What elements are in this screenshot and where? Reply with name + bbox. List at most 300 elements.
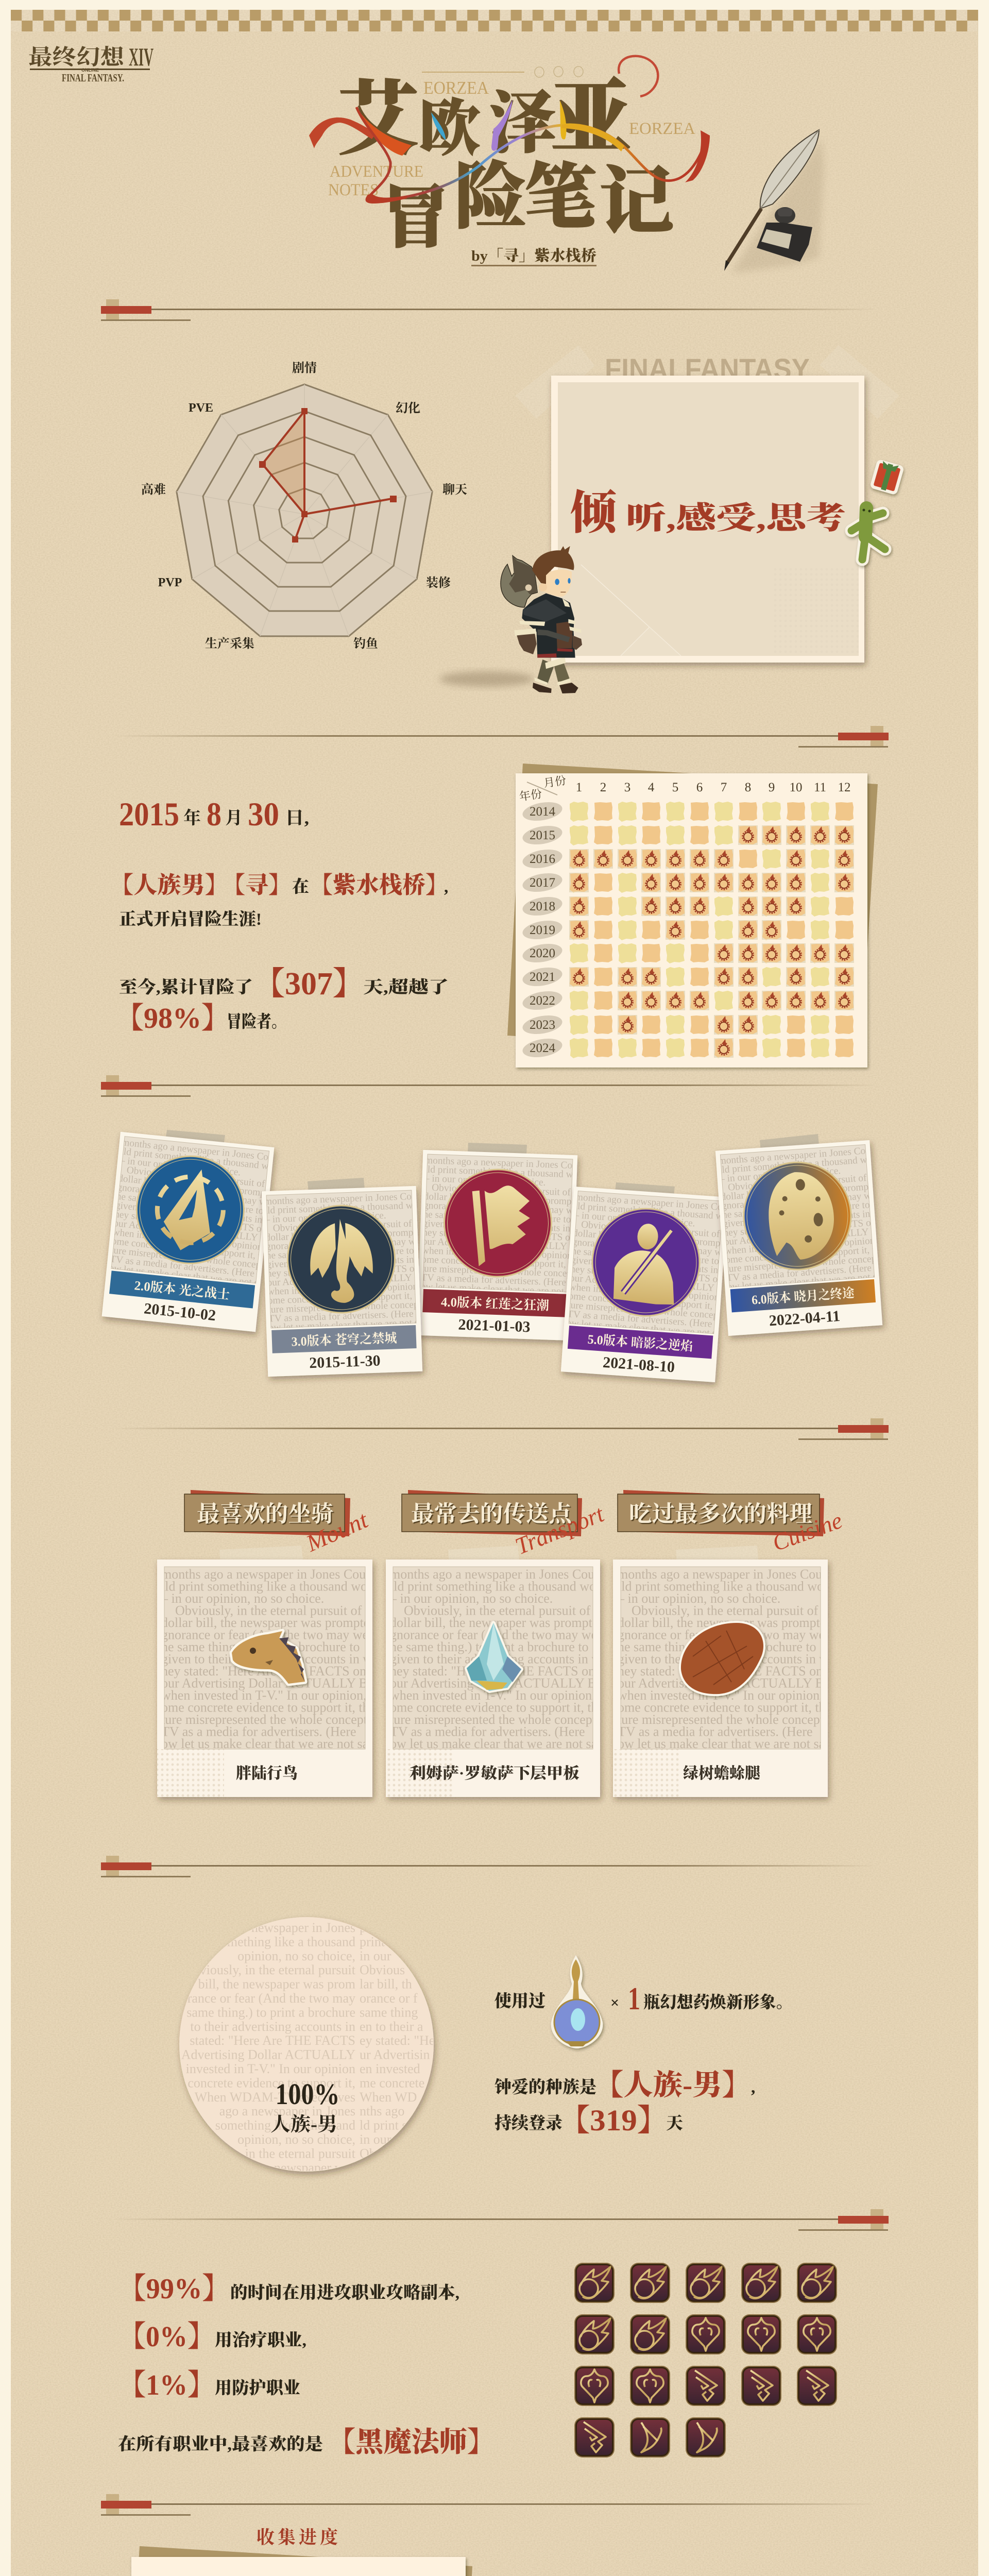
panel: motto note card: FINALFANTASY <box>605 352 810 385</box>
card: 5.0 expansion: ow let us make clear that we are not sa <box>566 1318 721 1340</box>
card: 5.0 expansion: – in our opinion, no so choice. <box>573 1210 695 1229</box>
card: 2.0 expansion: ome concrete evidence to support it, the <box>111 1236 271 1263</box>
calendar header: 10 <box>789 781 803 794</box>
medal <box>589 1205 703 1319</box>
chart: race share circle: en invested <box>360 2061 420 2076</box>
chart: race share circle: lar bill, th <box>360 1977 412 1992</box>
card: mount: he same thing.) to print a brochure to <box>161 1639 360 1654</box>
card: 6.0 expansion: dollar bill, the newspaper was prompted <box>721 1181 881 1202</box>
text block: adventure start: , <box>444 878 448 896</box>
card: 6.0 expansion <box>715 1139 904 1336</box>
card: 3.0 expansion: ow let us make clear that we are not sa <box>268 1317 423 1333</box>
divider 7 <box>101 2494 878 2516</box>
text block: adventure start: 【紫水栈桥】 <box>310 872 449 898</box>
card: mount: gnorance or fear (And the two may well <box>161 1627 376 1642</box>
card: mount: dollar bill, the newspaper was prompted <box>161 1615 376 1630</box>
chart: race share circle: in our <box>360 1948 391 1963</box>
card: 5.0 expansion: dollar bill, the newspaper was prompted <box>572 1228 733 1250</box>
card: 5.0 expansion: 5.0版本 暗影之逆焰 <box>587 1332 693 1354</box>
card: 6.0 expansion: – in our opinion, no so choice. <box>719 1165 841 1184</box>
card: 2.0 expansion: given to their advertising accounts in wh <box>115 1200 278 1227</box>
icon: gift sticker <box>872 460 903 494</box>
card: teleport: hey stated: "Here Are THE FACTS on w <box>390 1664 608 1679</box>
card: 4.0 expansion: when invested in T-V." In our opinion, w <box>422 1245 585 1262</box>
calendar header: 年份 <box>519 787 543 803</box>
radar chart: PVP <box>158 576 182 589</box>
icon: cactuar sticker <box>851 508 885 560</box>
card: 2.0 expansion: gnorance or fear (And the two may well <box>116 1182 277 1209</box>
card: 2.0 expansion: our Advertising Dollar ACTUALLY BUYS <box>113 1218 287 1246</box>
chart: race share circle: something like a thousand <box>215 1934 355 1949</box>
heading: favourite mount: 最喜欢的坐骑 <box>197 1501 334 1527</box>
card: 4.0 expansion: months ago a newspaper in Jones County <box>425 1155 590 1172</box>
card: 3.0 expansion: hey stated: "Here Are THE FACTS on w <box>267 1263 429 1279</box>
card: cuisine: dollar bill, the newspaper was prompted <box>618 1615 832 1630</box>
card: 5.0 expansion: Obviously, in the eternal pursuit of <box>581 1219 721 1240</box>
text block: fantasia usage: 钟爱的种族是 <box>494 2078 596 2097</box>
panel: login calendar <box>507 764 878 1067</box>
calendar year pills <box>521 799 564 1060</box>
card: teleport: 利姆萨·罗敏萨下层甲板 <box>410 1765 579 1782</box>
tapes for favourite cards <box>219 1546 758 1564</box>
card: 5.0 expansion: months ago a newspaper in Jones County <box>575 1192 741 1214</box>
chart: race share circle: ago a newspaper in Jones <box>219 2104 355 2119</box>
card: cuisine: our Advertising Dollar ACTUALLY BUYS <box>618 1675 851 1691</box>
chart: race share circle: nths ago <box>360 2104 404 2119</box>
card: teleport: he same thing.) to print a brochure to <box>390 1639 589 1654</box>
card: cuisine: ome concrete evidence to support it, the <box>618 1700 831 1715</box>
icon: chocobo head sticker <box>232 1631 305 1684</box>
radar data polygon <box>262 411 393 539</box>
card: teleport: – in our opinion, no so choice. <box>389 1591 553 1606</box>
logo: Final Fantasy XIV: 最终幻想 <box>28 45 126 70</box>
text block: adventure start: 正式开启冒险生涯! <box>119 909 262 929</box>
title: 艾欧泽亚冒险笔记: ADVENTURE <box>330 162 423 180</box>
chart: race share circle: When WD <box>360 2090 417 2105</box>
chart: race share circle: bill, the newspaper was prom <box>198 1977 355 1992</box>
card: 5.0 expansion: given to their advertising accounts in wh <box>571 1255 734 1277</box>
chart: race share circle: Obvious <box>360 1962 405 1977</box>
calendar year pills: 2024 <box>530 1041 555 1055</box>
card: 2.0 expansion: 2015-10-02 <box>143 1300 216 1324</box>
divider 1 <box>101 299 878 321</box>
chart: race share circle: ey stated: "He <box>360 2033 435 2048</box>
text block: adventure start: 年 <box>183 808 201 828</box>
card: 4.0 expansion: ture misrepresented the whole concept <box>421 1263 575 1279</box>
card: cuisine: ild print something like a thousand words <box>618 1579 840 1594</box>
card: mount: Obviously, in the eternal pursuit of <box>175 1603 362 1618</box>
logo: Final Fantasy XIV: ONLINE <box>81 67 99 73</box>
heading: favourite teleport: 最常去的传送点 <box>411 1501 573 1527</box>
card: mount: given to their advertising accounts in wh <box>161 1652 379 1666</box>
card: 6.0 expansion: 2022-04-11 <box>769 1308 841 1329</box>
text block: adventure start: 至今,累计冒险了 <box>119 978 253 997</box>
chart: race share circle: Obvi <box>360 2146 386 2161</box>
title: 艾欧泽亚冒险笔记: EORZEA <box>423 78 489 98</box>
chart: race share circle: ur Advertisin <box>360 2047 430 2062</box>
card: 4.0 expansion: 2021-01-03 <box>458 1316 531 1335</box>
card: 4.0 expansion: ome concrete evidence to support it, the <box>421 1254 581 1270</box>
text block: fantasia usage <box>494 1981 793 2137</box>
card: 4.0 expansion: TV as a media for advertisers. (Here <box>421 1272 566 1288</box>
tapes for expansion cards <box>165 1130 819 1196</box>
heading: favourite cuisine: Cuisine <box>769 1507 846 1556</box>
card: 6.0 expansion: Obviously, in the eternal pursuit of <box>728 1173 867 1193</box>
text block: adventure start: 【98%】 <box>115 1003 230 1035</box>
card: teleport: ild print something like a thousand words <box>390 1579 612 1594</box>
card: cuisine: when invested in T-V." In our opinion, w <box>618 1688 836 1703</box>
panel: motto note card <box>516 346 899 663</box>
card: 5.0 expansion: TV as a media for advertisers. (Here <box>567 1309 712 1330</box>
radar chart <box>141 361 467 651</box>
card: teleport: our Advertising Dollar ACTUALLY BUYS <box>390 1675 623 1691</box>
card: 6.0 expansion: gnorance or fear (And the two may well <box>721 1190 881 1212</box>
chart: race share circle: a newspaper in Jones <box>242 1920 355 1935</box>
text block: fantasia usage: 使用过 <box>494 1992 545 2011</box>
card: teleport: Obviously, in the eternal pursuit of <box>404 1603 591 1618</box>
divider 6 <box>113 2209 889 2231</box>
calendar header: 3 <box>624 781 630 794</box>
divider 2 <box>113 726 889 748</box>
title: 艾欧泽亚冒险笔记: 欧 <box>419 95 480 163</box>
chart: race share circle: Obviously, in the eternal pursuit <box>183 1962 356 1977</box>
chart: race share circle: to their advertising accounts in <box>190 2019 355 2034</box>
calendar cells <box>570 802 854 1058</box>
card: mount: 胖陆行鸟 <box>236 1765 298 1782</box>
text block: adventure start: 日, <box>285 809 309 828</box>
text block: adventure start <box>110 796 449 1035</box>
card: cuisine: months ago a newspaper in Jones County <box>618 1567 839 1582</box>
card: 6.0 expansion: hey stated: "Here Are THE FACTS on w <box>723 1216 886 1239</box>
chart: race share circle: in the eternal pursuit <box>245 2146 356 2161</box>
text block: fantasia usage: 【319】 <box>558 2104 669 2137</box>
card: 4.0 expansion <box>417 1150 599 1342</box>
chart: race share circle: me concrete e <box>360 2075 434 2090</box>
calendar year pills: 2018 <box>530 900 555 913</box>
card: 2.0 expansion: TV as a media for advertisers. (Here <box>109 1253 255 1279</box>
title: 艾欧泽亚冒险笔记 <box>309 56 710 256</box>
radar chart: 钓鱼 <box>353 637 378 651</box>
radar chart: 装修 <box>426 576 451 590</box>
card: 6.0 expansion: 6.0版本 晓月之终途 <box>751 1286 856 1308</box>
card: 3.0 expansion: he same thing.) to print a brochure to <box>266 1245 414 1261</box>
calendar header: 11 <box>814 781 826 794</box>
text block: fantasia usage: 持续登录 <box>494 2114 562 2133</box>
medal <box>740 1159 855 1273</box>
text block: job role usage: 用治疗职业, <box>215 2330 306 2350</box>
text block: adventure start: 【307】 <box>253 967 365 1002</box>
card: 4.0 expansion: dollar bill, the newspaper was prompted <box>423 1191 584 1208</box>
card: teleport: ome concrete evidence to support it, the <box>390 1700 604 1715</box>
medal <box>286 1204 397 1315</box>
card: 3.0 expansion <box>262 1185 444 1377</box>
card: 4.0 expansion: hey stated: "Here Are THE FACTS on w <box>422 1227 585 1244</box>
card: 6.0 expansion: months ago a newspaper in Jones County <box>718 1144 883 1166</box>
card: cuisine: Obviously, in the eternal pursuit of <box>632 1603 819 1618</box>
card: cuisine: hey stated: "Here Are THE FACTS on w <box>618 1664 836 1679</box>
card: mount: months ago a newspaper in Jones County <box>161 1567 383 1582</box>
icon: aether crystal sticker <box>467 1623 521 1691</box>
chart: race share circle: orance or f <box>360 1991 418 2006</box>
card: 3.0 expansion: ture misrepresented the whole concept <box>268 1299 422 1315</box>
logo: Final Fantasy XIV: XIV <box>129 42 154 71</box>
card: 6.0 expansion: our Advertising Dollar ACTUALLY BUYS <box>724 1225 898 1248</box>
card: cuisine: gnorance or fear (And the two may well <box>618 1627 832 1642</box>
card: 5.0 expansion: 2021-08-10 <box>602 1354 675 1376</box>
card: 5.0 expansion: gnorance or fear (And the two may well <box>572 1236 732 1259</box>
chart: race share circle: en to their a <box>360 2019 423 2034</box>
text block: job role usage: 【1%】 <box>118 2369 215 2401</box>
logo: Final Fantasy XIV <box>28 42 154 84</box>
card: teleport: gnorance or fear (And the two may well <box>390 1627 605 1642</box>
chart: race share circle: the newspaper was <box>254 2160 355 2175</box>
card: 3.0 expansion: our Advertising Dollar ACTUALLY BUYS <box>267 1272 441 1289</box>
card: mount <box>157 1560 395 1797</box>
chart: race share circle: in our <box>360 2132 391 2147</box>
card: 3.0 expansion: TV as a media for advertisers. (Here <box>268 1309 414 1325</box>
panel: collection progress <box>125 2546 472 2576</box>
card: 5.0 expansion: ome concrete evidence to support it, the <box>568 1291 728 1313</box>
calendar year pills: 2017 <box>530 876 555 890</box>
chart: race share circle: ld print s <box>360 2118 407 2133</box>
card: 6.0 expansion: when invested in T-V." In our opinion, w <box>724 1234 888 1257</box>
card: 4.0 expansion: ow let us make clear that we are not sa <box>420 1281 575 1297</box>
text block: fantasia usage: 1 <box>628 1981 640 2016</box>
title: 艾欧泽亚冒险笔记: EORZEA <box>629 120 695 138</box>
byline: by「寻」紫水栈桥 <box>471 247 596 264</box>
calendar year pills: 2019 <box>530 923 555 937</box>
calendar header <box>519 774 851 803</box>
card: 3.0 expansion: gnorance or fear (And the two may well <box>266 1236 425 1252</box>
chart: race share circle: same thing.) to print a brochure <box>186 2005 355 2020</box>
heading: favourite cuisine <box>618 1490 846 1556</box>
radar chart: PVE <box>189 401 213 415</box>
text block: adventure start: 【人族男】 <box>110 872 229 898</box>
card: 5.0 expansion: our Advertising Dollar ACTUALLY BUYS <box>569 1273 743 1296</box>
logo: Final Fantasy XIV: FINAL FANTASY. <box>62 72 124 84</box>
radar chart: 高难 <box>141 482 166 497</box>
heading: favourite cuisine: 吃过最多次的料理 <box>629 1501 812 1527</box>
card: 2.0 expansion: months ago a newspaper in Jones County <box>121 1137 287 1164</box>
divider 4 <box>113 1418 889 1440</box>
card: teleport: months ago a newspaper in Jones County <box>390 1567 611 1582</box>
card: 3.0 expansion: dollar bill, the newspaper was prompted <box>265 1227 426 1243</box>
chart: race share circle: opinion, no so choice, <box>237 1948 355 1963</box>
card: teleport: TV as a media for advertisers. (Here <box>390 1724 585 1739</box>
card: 2.0 expansion: – in our opinion, no so choice. <box>119 1155 241 1178</box>
card: cuisine: 绿树蟾蜍腿 <box>683 1765 761 1782</box>
heading: favourite mount <box>184 1490 372 1557</box>
title: 艾欧泽亚冒险笔记: 笔 <box>524 159 596 239</box>
text block: job role usage: 用防护职业 <box>215 2379 300 2398</box>
heading: favourite mount: Mount <box>302 1506 372 1557</box>
text block: fantasia usage: , <box>751 2078 755 2097</box>
calendar year pills: 2023 <box>530 1018 555 1032</box>
card: 2.0 expansion: dollar bill, the newspaper was prompted <box>117 1173 278 1200</box>
panel: motto note card: 听,感受,思考 <box>626 501 846 535</box>
chart: race share circle: When WDAM-TV executives <box>195 2090 355 2105</box>
card: 2.0 expansion: ow let us make clear that we are not sa <box>109 1263 263 1289</box>
chart: race share circle: opinion, no so choice, <box>237 2132 355 2147</box>
card: 3.0 expansion: given to their advertising accounts in wh <box>266 1254 429 1270</box>
calendar header: 2 <box>600 781 606 794</box>
calendar year pills: 2020 <box>530 946 555 960</box>
calendar header: 7 <box>721 781 727 794</box>
text block: job role usage: 在所有职业中,最喜欢的是 <box>118 2435 323 2454</box>
card: 3.0 expansion: ild print something like a thousand words <box>264 1199 430 1216</box>
heading: collection progress: 收集进度 <box>257 2528 338 2548</box>
chart: race share circle: invested in T-V." In our opinion <box>186 2061 355 2076</box>
card: 3.0 expansion: months ago a newspaper in Jones County <box>264 1191 430 1207</box>
title: 艾欧泽亚冒险笔记: NOTES <box>328 181 379 199</box>
calendar header: 6 <box>696 781 703 794</box>
card: 5.0 expansion: he same thing.) to print a brochure to <box>571 1246 720 1267</box>
title: 艾欧泽亚冒险笔记: 泽 <box>489 87 556 161</box>
medal <box>442 1167 553 1279</box>
card: mount: TV as a media for advertisers. (Here <box>161 1724 356 1739</box>
card: mount: ow let us make clear that we are not sa <box>161 1736 369 1751</box>
card: 6.0 expansion: TV as a media for advertisers. (Here <box>726 1263 872 1283</box>
card: mount: when invested in T-V." In our opinion, w <box>161 1688 380 1703</box>
calendar header: 1 <box>576 781 582 794</box>
card: 5.0 expansion <box>561 1187 749 1384</box>
card: 2.0 expansion <box>102 1132 296 1334</box>
card: 4.0 expansion: gnorance or fear (And the two may well <box>423 1200 583 1216</box>
calendar header: 12 <box>838 781 851 794</box>
card: cuisine: ow let us make clear that we are not sa <box>618 1736 825 1751</box>
card: 5.0 expansion: hey stated: "Here Are THE FACTS on w <box>570 1264 733 1286</box>
heading: favourite teleport: Transport <box>511 1500 608 1560</box>
text block: adventure start: 在 <box>292 877 309 896</box>
text block: adventure start: 8 <box>207 796 221 833</box>
card: mount: hey stated: "Here Are THE FACTS on w <box>161 1664 380 1679</box>
card: 3.0 expansion: 3.0版本 苍穹之禁城 <box>291 1331 397 1349</box>
radar chart: 剧情 <box>292 361 317 375</box>
text block: adventure start: 30 <box>248 796 279 833</box>
card: 6.0 expansion: ture misrepresented the whole concept <box>726 1253 880 1275</box>
card: 2.0 expansion: ild print something like a thousand words <box>121 1146 286 1174</box>
chart: race share circle <box>167 1917 435 2175</box>
card: 3.0 expansion: Obviously, in the eternal pursuit of <box>272 1218 412 1234</box>
card: cuisine: given to their advertising accounts in wh <box>618 1652 835 1666</box>
card: 5.0 expansion: ild print something like a thousand words <box>574 1201 740 1223</box>
chart: race share circle: stated: "Here Are THE FACTS <box>190 2033 355 2048</box>
title: 艾欧泽亚冒险笔记: 亚 <box>550 74 632 164</box>
card: 5.0 expansion: ture misrepresented the whole concept <box>568 1300 722 1321</box>
card: cuisine: he same thing.) to print a brochure to <box>618 1639 816 1654</box>
text block: adventure start: 天,超越了 <box>363 977 449 997</box>
card: teleport: dollar bill, the newspaper was prompted <box>390 1615 605 1630</box>
calendar year pills: 2016 <box>530 852 555 866</box>
card: 2.0 expansion: he same thing.) to print a brochure to <box>116 1191 264 1216</box>
calendar year pills: 2022 <box>530 994 555 1008</box>
chart: race share circle: print s <box>360 1934 394 1949</box>
divider 3 <box>101 1075 878 1097</box>
card: 6.0 expansion: ome concrete evidence to support it, the <box>725 1244 884 1266</box>
card: 4.0 expansion: he same thing.) to print a brochure to <box>423 1209 571 1225</box>
radar chart: 聊天 <box>442 483 467 497</box>
heading: favourite teleport <box>402 1490 608 1560</box>
card: 6.0 expansion: given to their advertising accounts in wh <box>723 1208 885 1230</box>
title: 艾欧泽亚冒险笔记: 冒 <box>382 180 450 256</box>
chart: race share circle: same thing <box>360 2005 418 2020</box>
card: 2.0 expansion: ture misrepresented the whole concept <box>110 1245 264 1271</box>
card: cuisine <box>613 1560 851 1797</box>
text block: fantasia usage: 瓶幻想药焕新形象。 <box>643 1993 793 2011</box>
card: teleport: ture misrepresented the whole concept <box>390 1712 596 1727</box>
icon: steak sticker <box>681 1623 763 1694</box>
character: chibi warrior with axe <box>439 546 582 693</box>
chart: race share circle: gnorance or fear (And the two may <box>167 1991 355 2006</box>
calendar header: 月份 <box>543 774 567 790</box>
radar chart: 生产采集 <box>205 637 254 651</box>
card: 6.0 expansion: ow let us make clear that we are not sa <box>727 1271 882 1293</box>
card: 4.0 expansion: – in our opinion, no so choice. <box>424 1173 546 1188</box>
card: 6.0 expansion: he same thing.) to print a brochure to <box>722 1199 870 1221</box>
card: 3.0 expansion: 2015-11-30 <box>309 1352 381 1371</box>
card: cuisine: – in our opinion, no so choice. <box>617 1591 780 1606</box>
medal <box>131 1151 249 1268</box>
text block: adventure start: 2015 <box>119 796 179 833</box>
chart: race share circle: something like a thousand <box>215 2118 355 2133</box>
card: mount: ome concrete evidence to support it, the <box>161 1700 375 1715</box>
card: 4.0 expansion: our Advertising Dollar ACTUALLY BUYS <box>422 1236 596 1253</box>
card: 4.0 expansion: 4.0版本 红莲之狂潮 <box>441 1295 549 1313</box>
card: mount: ild print something like a thousand words <box>161 1579 384 1594</box>
card: mount: ture misrepresented the whole concept <box>161 1712 368 1727</box>
chart: race share circle: 人族-男 <box>270 2114 337 2136</box>
card: cuisine: TV as a media for advertisers. (Here <box>618 1724 813 1739</box>
card: mount: our Advertising Dollar ACTUALLY BUYS <box>161 1675 395 1691</box>
card: 3.0 expansion: – in our opinion, no so choice. <box>264 1210 386 1225</box>
title: 艾欧泽亚冒险笔记: 艾 <box>337 75 419 165</box>
card: 4.0 expansion: Obviously, in the eternal pursuit of <box>432 1182 571 1198</box>
text block: job role usage: 【0%】 <box>118 2321 215 2353</box>
calendar year pills: 2015 <box>530 828 555 842</box>
calendar login markers <box>569 825 854 1058</box>
radar chart: 幻化 <box>396 401 420 415</box>
title: 艾欧泽亚冒险笔记: 险 <box>454 158 526 238</box>
text block: adventure start: 月 <box>225 809 243 828</box>
card: 4.0 expansion: given to their advertising accounts in wh <box>423 1218 585 1234</box>
text block: fantasia usage: 【人族-男】 <box>594 2070 752 2102</box>
icon: quill and ink bottle <box>724 130 824 273</box>
icon grid: job icons <box>574 2263 837 2458</box>
text block: job role usage: 的时间在用进攻职业攻略副本, <box>230 2283 459 2302</box>
text block: job role usage: 【99%】 <box>118 2273 230 2305</box>
card: teleport: when invested in T-V." In our opinion, w <box>390 1688 608 1703</box>
text block: fantasia usage: 天 <box>666 2114 683 2133</box>
text block: job role usage <box>118 2273 495 2458</box>
icon: fantasia bottle <box>551 1955 603 2048</box>
text block: fantasia usage: × <box>610 1994 619 2011</box>
chart: race share circle: print <box>360 1920 385 1935</box>
text block: adventure start: 【寻】 <box>222 872 292 898</box>
divider 5 <box>101 1856 878 1877</box>
calendar header: 8 <box>745 781 751 794</box>
calendar year pills: 2014 <box>530 805 555 819</box>
text block: adventure start: 冒险者。 <box>227 1012 286 1031</box>
card: 3.0 expansion: ome concrete evidence to support it, the <box>267 1290 427 1307</box>
card: cuisine: ture misrepresented the whole concept <box>618 1712 824 1727</box>
calendar year pills: 2021 <box>530 970 555 984</box>
card: teleport: ow let us make clear that we are not sa <box>390 1736 598 1751</box>
calendar header: 9 <box>769 781 775 794</box>
card: 2.0 expansion: 2.0版本 光之战士 <box>134 1278 230 1302</box>
card: 5.0 expansion: when invested in T-V." In our opinion, w <box>569 1282 731 1304</box>
chart: race share circle: Advertising Dollar ACTUALLY <box>181 2047 355 2062</box>
chart: race share circle: 100% <box>275 2077 340 2111</box>
